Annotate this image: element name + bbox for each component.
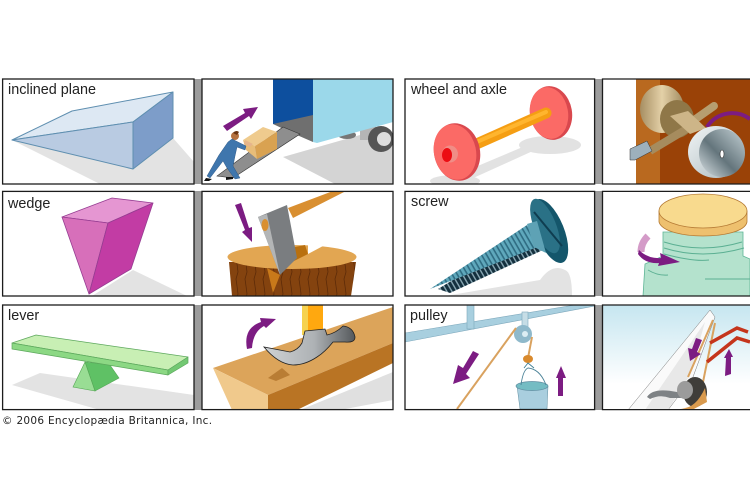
wedge solid (62, 198, 153, 294)
arrow: rotation (707, 113, 750, 127)
plank (12, 335, 188, 375)
worker pushing (204, 131, 253, 181)
panel: truck ramp example (202, 79, 394, 184)
panel: lever diagram (3, 305, 194, 410)
grey gutters between paired panels (194, 79, 602, 410)
label: wedge: wedge (7, 196, 50, 212)
panel: pulley diagram (405, 305, 600, 410)
screw shadow (445, 268, 572, 296)
axe head (258, 205, 297, 275)
screw head (527, 198, 568, 263)
right wheel (530, 86, 572, 140)
jar threads (648, 242, 750, 279)
inclined plane shadow (12, 138, 194, 184)
cardboard box (243, 127, 277, 159)
pulley wheel (514, 312, 532, 343)
inclined plane solid (12, 92, 173, 169)
panel: wheel and axle diagram (411, 83, 581, 184)
panel: screw diagram (411, 198, 572, 296)
left wheel (434, 123, 480, 181)
panel: axe example (228, 192, 356, 296)
bucket (516, 363, 548, 409)
lever shadow (12, 373, 194, 410)
sail (628, 310, 715, 410)
wedge shadow (92, 270, 187, 296)
jar body (643, 232, 750, 296)
latch bolt (630, 141, 652, 160)
screw thread (430, 225, 543, 293)
axe handle (288, 191, 346, 218)
board (213, 307, 393, 410)
label: wheel and axle: wheel and axle (410, 82, 507, 98)
board shadow (300, 372, 393, 410)
tackle rope (688, 320, 715, 387)
panel: sailboat pulley example (602, 305, 750, 410)
arrow: line up (724, 349, 733, 376)
overhead pipe (405, 305, 600, 342)
panel: hammer and nail example (202, 305, 393, 410)
arrow: bucket up (556, 366, 566, 396)
label: screw: screw (411, 194, 449, 210)
log top (228, 245, 356, 269)
truck box (273, 79, 393, 143)
split in log (267, 244, 323, 293)
wheel and axle shadow (430, 136, 581, 187)
arrow: down (235, 203, 252, 242)
label: inclined plane: inclined plane (8, 82, 96, 98)
panel: jar lid example (602, 191, 750, 296)
label: lever: lever (8, 308, 39, 324)
copyright line: © 2006 Encyclopædia Britannica, Inc. (2, 415, 212, 427)
inner knob and spindle (640, 85, 714, 151)
label: pulley: pulley (410, 308, 448, 324)
arrow: twist (638, 236, 680, 266)
ramp (217, 127, 300, 178)
arrow: line down (688, 338, 702, 361)
hammer handle (302, 305, 323, 335)
log trunk (229, 262, 356, 296)
outer knob (688, 126, 745, 178)
arrow: pull (246, 318, 276, 349)
lid (659, 194, 747, 236)
panel: wedge diagram (8, 197, 186, 296)
axle (472, 112, 546, 146)
truck shadow (283, 135, 393, 184)
arrow: up the ramp (223, 107, 258, 131)
nail marks (268, 368, 290, 381)
rope (457, 328, 532, 409)
arrow: rope down (453, 351, 479, 384)
door (636, 79, 750, 184)
hammer head (264, 326, 355, 365)
panel borders (3, 79, 750, 410)
fulcrum (73, 362, 119, 391)
cleat and block (647, 377, 707, 410)
truck wheel (338, 125, 394, 152)
rope knot (523, 355, 533, 363)
panel: inclined plane diagram (3, 79, 194, 184)
red lines (707, 328, 750, 362)
panel: doorknob example (630, 80, 750, 184)
